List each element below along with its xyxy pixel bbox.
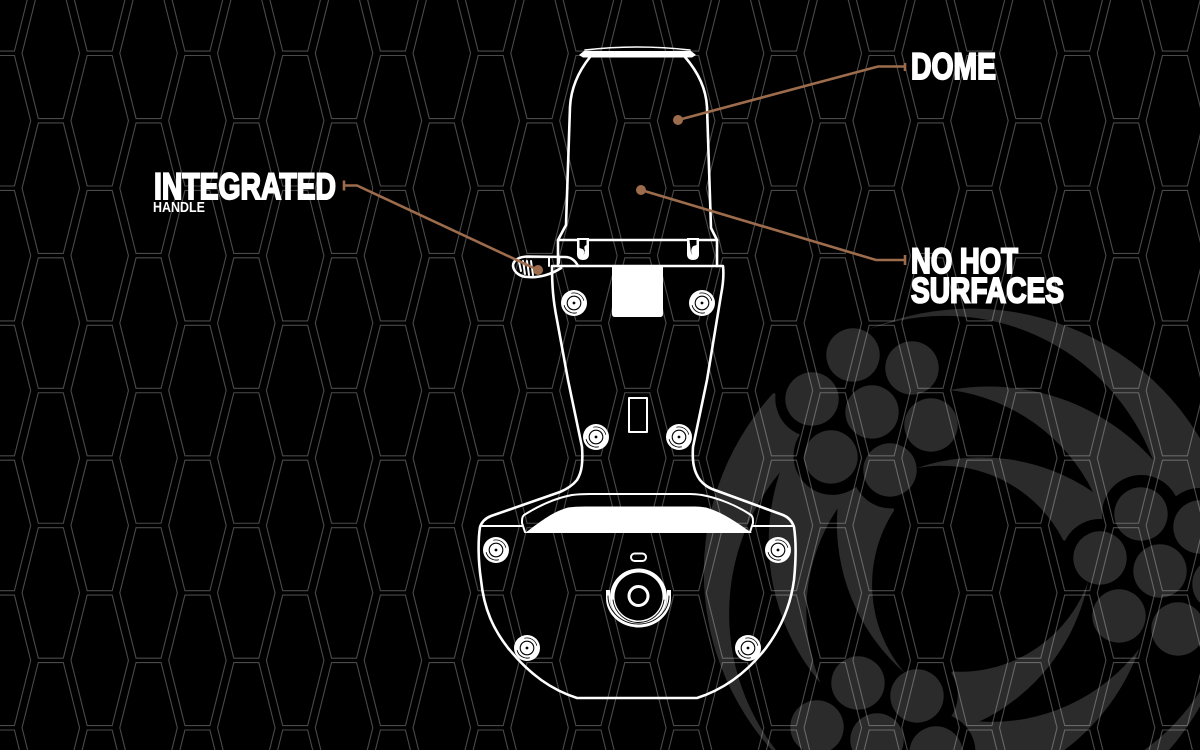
dome outline bbox=[558, 57, 717, 240]
leader: dome bbox=[673, 63, 905, 125]
dome rim bbox=[579, 47, 696, 58]
label: dome: DOME bbox=[911, 46, 996, 87]
visor fill bbox=[525, 506, 752, 533]
label: handle: HANDLE bbox=[153, 200, 205, 216]
body outline bbox=[479, 266, 796, 698]
label: integrated: INTEGRATED bbox=[154, 165, 336, 207]
left clip bbox=[577, 238, 589, 260]
white rear panel bbox=[612, 267, 663, 317]
product line drawing bbox=[479, 47, 796, 698]
collar bbox=[558, 240, 717, 266]
status light bbox=[631, 554, 646, 561]
vent slot bbox=[629, 398, 647, 432]
emblem watermark bbox=[613, 309, 1200, 750]
label: no hot surfaces: SURFACES bbox=[911, 270, 1064, 310]
visor outline bbox=[522, 494, 753, 532]
lower body seam lines bbox=[482, 525, 792, 527]
mounting screws bbox=[483, 290, 791, 661]
integrated handle bbox=[513, 256, 578, 277]
leader: no hot surfaces bbox=[636, 185, 905, 265]
right clip bbox=[687, 238, 699, 260]
label: no hot surfaces: NO HOT bbox=[911, 241, 1018, 281]
camera lens bbox=[606, 568, 671, 628]
leader: integrated handle bbox=[344, 180, 543, 275]
